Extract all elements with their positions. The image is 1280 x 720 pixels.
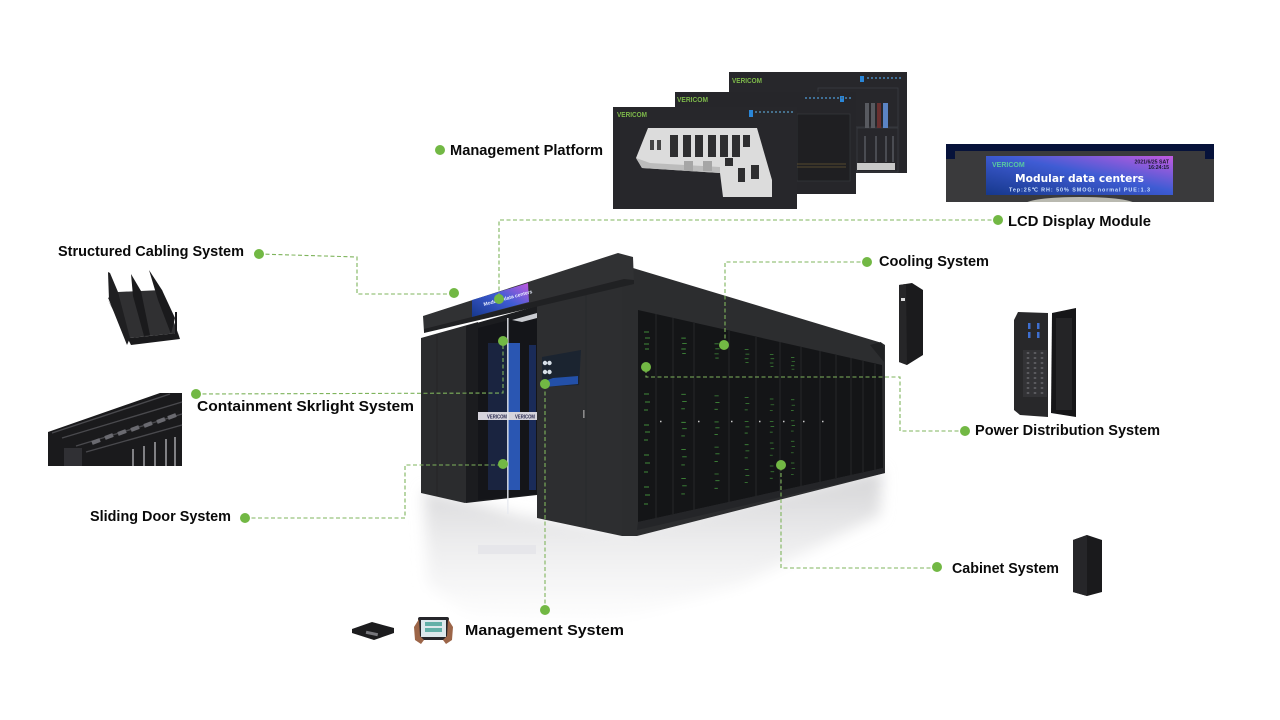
LCD screen: Modular data centers — [1015, 172, 1144, 185]
LCD screen — [986, 156, 1173, 195]
label: Structured Cabling System: Structured Cabling System — [58, 244, 244, 260]
icon: containment skylight — [48, 393, 182, 466]
label: Sliding Door System: Sliding Door System — [90, 509, 231, 525]
LCD display module image — [946, 144, 1214, 202]
left front panel — [421, 322, 478, 503]
LCD on roof — [472, 283, 533, 317]
status indicators — [644, 332, 795, 504]
vented cabinet doors — [637, 310, 885, 530]
LCD screen: VERICOM — [992, 162, 1025, 169]
label: Management Platform: Management Platform — [450, 143, 603, 159]
door banner: VERICOM — [515, 414, 535, 420]
icon: cable tray — [108, 270, 180, 345]
LCD on roof: Modular data centers — [483, 289, 533, 308]
label: Cooling System: Cooling System — [879, 254, 989, 270]
containment door opening — [466, 306, 537, 514]
door banner: VERICOM — [487, 414, 507, 420]
marker dots — [191, 145, 1003, 615]
label: Containment Skrlight System: Containment Skrlight System — [197, 398, 414, 415]
right front panel — [537, 283, 622, 536]
LCD screen: Tep:25℃ RH: 50% SMOG: normal PUE:1.3 — [1009, 186, 1150, 194]
roof front — [423, 253, 634, 332]
door handles — [660, 420, 824, 422]
label: LCD Display Module: LCD Display Module — [1008, 214, 1151, 230]
modular data center unit — [421, 253, 885, 536]
side wall — [622, 268, 885, 536]
screen: middle chart: VERICOM — [677, 95, 708, 104]
label: Power Distribution System: Power Distribution System — [975, 423, 1160, 439]
LCD screen: 16:24:15 — [1148, 165, 1169, 171]
blue racks — [488, 343, 508, 490]
screen: front 3D layout — [613, 107, 797, 209]
screen: back dashboard: VERICOM — [732, 76, 762, 85]
icon: tablet in hands — [414, 617, 453, 644]
label: Cabinet System: Cabinet System — [952, 561, 1059, 577]
icon: cooling unit — [899, 283, 923, 365]
floor reflection — [424, 470, 882, 625]
screen: back dashboard — [729, 72, 907, 173]
icon: controller box — [352, 622, 394, 640]
label: Management System: Management System — [465, 622, 624, 639]
touch panel — [542, 350, 581, 387]
management platform screens — [613, 72, 907, 209]
icon: power distribution cabinet — [1014, 308, 1076, 417]
screen: middle chart — [675, 92, 856, 194]
icon: cabinet — [1073, 535, 1102, 596]
door banner — [478, 412, 537, 420]
leader lines — [196, 220, 998, 610]
LCD screen: 2021/6/25 SAT — [1134, 160, 1170, 166]
screen: front 3D layout: VERICOM — [617, 110, 647, 119]
